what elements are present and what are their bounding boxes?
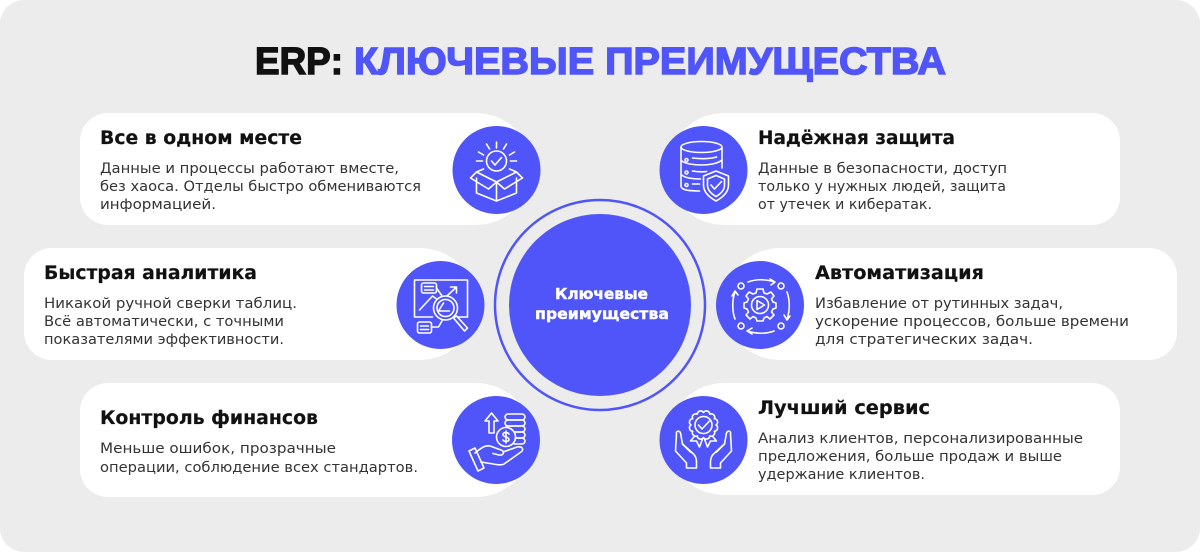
panel: Контроль финансов: операции, соблюдение всех стандартов. — [100, 460, 418, 476]
panel: Надёжная защита — [660, 113, 1120, 225]
panel: Лучший сервис — [660, 383, 1120, 495]
panel: Лучший сервис: удержание клиентов. — [758, 467, 925, 483]
panel: Автоматизация: для стратегических задач. — [815, 332, 1033, 348]
panel: Автоматизация: Избавление от рутинных задач, — [815, 296, 1063, 312]
center circle — [495, 200, 705, 410]
panel: Контроль финансов — [80, 383, 540, 497]
panel: Все в одном месте: без хаоса. Отделы быстро обмениваются — [100, 179, 421, 195]
icon: chart with magnifier — [396, 261, 484, 349]
icon: gear with play — [716, 261, 804, 349]
panel: Контроль финансов: Контроль финансов — [100, 407, 318, 429]
panel: Все в одном месте: информацией. — [100, 197, 216, 213]
icon: box with check — [452, 126, 540, 214]
panel: Быстрая аналитика: Всё автоматически, с точными — [44, 314, 284, 330]
panel: Все в одном месте: Все в одном месте — [100, 127, 302, 149]
panel: Все в одном месте: Данные и процессы работают вместе, — [100, 161, 399, 177]
panel: Быстрая аналитика — [24, 248, 484, 360]
panel: Быстрая аналитика: показателями эффективности. — [44, 332, 284, 348]
icon: hands with award badge — [660, 396, 748, 484]
center circle: Ключевые — [555, 285, 648, 303]
panel: Надёжная защита: Данные в безопасности, доступ — [758, 161, 1007, 177]
center circle: преимущества — [535, 305, 669, 323]
panel: Надёжная защита: Надёжная защита — [758, 127, 955, 149]
panel: Лучший сервис: предложения, больше продаж и выше — [758, 449, 1062, 465]
panel: Автоматизация — [716, 248, 1177, 360]
panel: Автоматизация: Автоматизация — [815, 262, 984, 284]
panel: Все в одном месте — [80, 113, 540, 225]
panel: Контроль финансов: Меньше ошибок, прозрачные — [100, 441, 336, 457]
title: КЛЮЧЕВЫЕ ПРЕИМУЩЕСТВА — [354, 41, 946, 83]
panel: Лучший сервис: Анализ клиентов, персонализированные — [758, 431, 1083, 447]
panel: Быстрая аналитика: Никакой ручной сверки таблиц. — [44, 296, 297, 312]
panel: Быстрая аналитика: Быстрая аналитика — [44, 262, 257, 284]
panel: Автоматизация: ускорение процессов, больше времени — [815, 314, 1129, 330]
icon: hand with coins — [452, 396, 540, 484]
icon: database with shield — [660, 126, 748, 214]
panel: Надёжная защита: только у нужных людей, защита — [758, 179, 1006, 195]
panel: Лучший сервис: Лучший сервис — [758, 397, 930, 419]
title: ERP: — [255, 41, 343, 83]
panel: Надёжная защита: от утечек и кибератак. — [758, 197, 932, 213]
